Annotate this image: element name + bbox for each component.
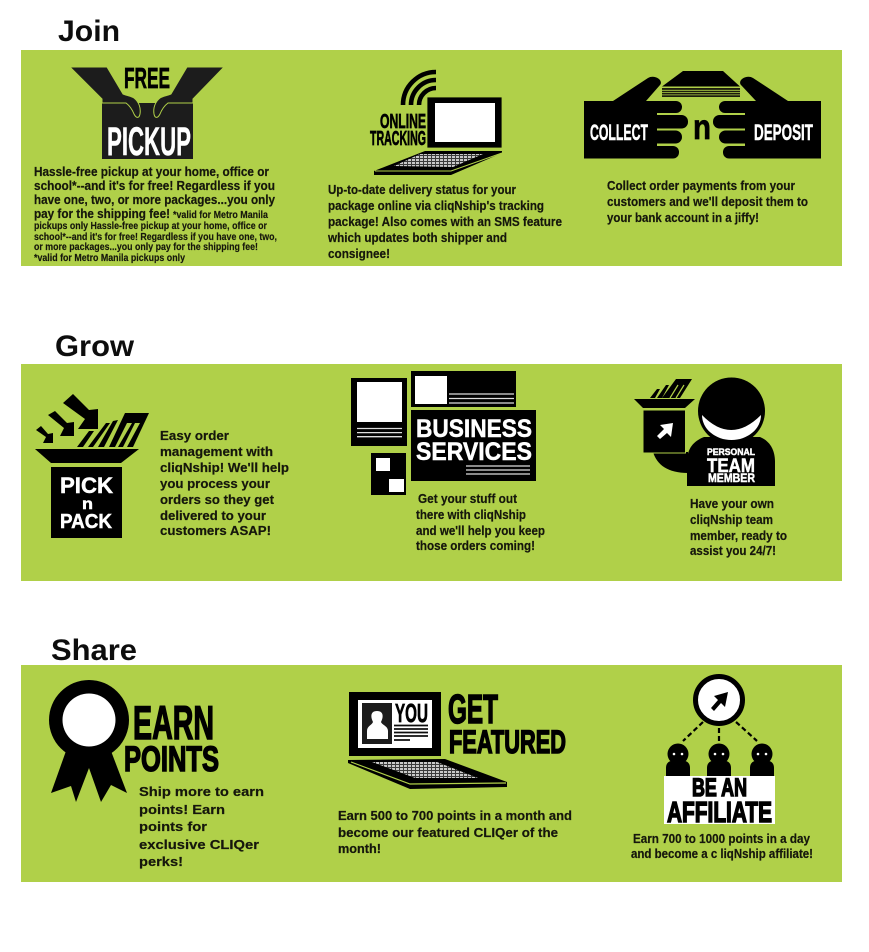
text: free pickup description: school*--and it's for free! Regardless if you have one, two,: [34, 232, 277, 243]
text: be an affiliate description: Earn 700 to 1000 points in a day: [633, 832, 810, 846]
text: personal team member description: assist you 24/7!: [690, 544, 776, 558]
text: get featured description: become our featured CLIQer of the: [338, 826, 558, 840]
icon: free pickup: PICKUP: [107, 120, 191, 164]
icon: business services: SERVICES: [416, 438, 532, 466]
icon: online tracking laptop: [370, 72, 502, 175]
text: free pickup description: *valid for Metro Manila pickups only: [34, 253, 185, 264]
text: pick n pack description: orders so they get: [160, 493, 275, 507]
text: personal team member description: member, ready to: [690, 529, 787, 543]
panel: Join: [21, 50, 842, 266]
icon: be an affiliate: [664, 676, 775, 829]
icon: get featured laptop: [348, 686, 566, 789]
icon: pick n pack: n: [82, 496, 93, 513]
text: free pickup description: pay for the shipping fee!: [34, 207, 170, 221]
icon: get featured laptop: GET: [448, 686, 498, 732]
text: free pickup description: school*--and it's for free! Regardless if you: [34, 179, 275, 193]
text: earn points description: [139, 785, 264, 869]
text: pick n pack description: Easy order: [160, 429, 229, 443]
text: earn points description: Ship more to earn: [139, 785, 264, 799]
text: get featured description: [338, 809, 572, 856]
icon: earn points ribbon: EARN: [133, 696, 214, 749]
text: earn points description: points! Earn: [139, 803, 225, 817]
icon: personal team member: [634, 378, 775, 486]
icon: collect n deposit: DEPOSIT: [754, 120, 813, 145]
text: online tracking description: package! Also comes with an SMS feature: [328, 215, 562, 229]
panel: Grow: [21, 364, 842, 581]
text: free pickup description: or more packages...you only pay for the shipping fee!: [34, 242, 258, 253]
text: business services description: and we'll help you keep: [416, 524, 545, 538]
icon: business services: [351, 371, 536, 495]
text: pick n pack description: customers ASAP!: [160, 524, 271, 538]
icon: online tracking laptop: TRACKING: [370, 128, 426, 150]
text: business services description: there with cliqNship: [416, 508, 526, 522]
icon: pick n pack: PACK: [60, 510, 112, 533]
text: pick n pack description: management with: [160, 445, 273, 459]
icon: pick n pack: [35, 394, 149, 538]
text: pick n pack description: [160, 429, 289, 538]
text: free pickup description: *valid for Metro Manila: [173, 210, 268, 221]
icon: be an affiliate: BE AN: [692, 774, 747, 802]
text: be an affiliate description: [631, 832, 813, 861]
icon: personal team member: MEMBER: [708, 471, 755, 485]
text: online tracking description: package online via cliqNship's tracking: [328, 199, 544, 213]
text: free pickup description: Hassle-free pickup at your home, office or: [34, 165, 269, 179]
text: online tracking description: Up-to-date delivery status for your: [328, 183, 516, 197]
text: get featured description: Earn 500 to 700 points in a month and: [338, 809, 572, 823]
icon: personal team member: TEAM: [707, 456, 755, 477]
icon: free pickup: FREE: [124, 63, 170, 95]
text: pick n pack description: delivered to your: [160, 509, 266, 523]
text: earn points description: points for: [139, 820, 207, 834]
text: free pickup description: pickups only Hassle-free pickup at your home, office or: [34, 221, 267, 232]
icon: free pickup: [70, 63, 224, 164]
text: free pickup description: [34, 165, 277, 264]
text: business services description: [416, 492, 545, 553]
text: online tracking description: [327, 183, 562, 261]
text: pick n pack description: you process your: [160, 477, 270, 491]
text: be an affiliate description: and become a c liqNship affiliate!: [631, 847, 813, 861]
text: online tracking description: consignee!: [328, 247, 390, 261]
icon: be an affiliate: AFFILIATE: [667, 797, 772, 829]
text: free pickup description: have one, two, or more packages...you only: [34, 193, 275, 207]
text: pick n pack description: cliqNship! We'll help: [160, 461, 289, 475]
icon: earn points ribbon: [49, 680, 219, 802]
text: earn points description: exclusive CLIQer: [139, 838, 259, 852]
text: get featured description: month!: [338, 842, 381, 856]
text: collect n deposit description: your bank account in a jiffy!: [607, 211, 759, 225]
text: earn points description: perks!: [139, 855, 183, 869]
text: personal team member description: cliqNship team: [690, 513, 773, 527]
icon: online tracking laptop: ONLINE: [380, 111, 426, 133]
text: collect n deposit description: [607, 179, 808, 225]
text: collect n deposit description: customers and we'll deposit them to: [607, 195, 808, 209]
text: online tracking description: which updates both shipper and: [327, 231, 507, 245]
icon: earn points ribbon: POINTS: [124, 740, 219, 779]
icon: collect n deposit: n: [693, 108, 711, 147]
icon: personal team member: PERSONAL: [707, 447, 755, 458]
icon: pick n pack: PICK: [60, 473, 113, 498]
text: business services description: those orders coming!: [416, 539, 535, 553]
icon: collect n deposit: [584, 71, 821, 158]
text: personal team member description: [690, 497, 787, 558]
text: personal team member description: Have your own: [690, 497, 774, 511]
icon: collect n deposit: COLLECT: [590, 120, 648, 145]
panel: Share: [21, 665, 842, 882]
heading: Join: Join: [58, 15, 120, 48]
icon: get featured laptop: YOU: [395, 698, 428, 728]
heading: Share: Share: [51, 634, 137, 667]
text: business services description: Get your stuff out: [418, 492, 518, 506]
text: collect n deposit description: Collect order payments from your: [607, 179, 795, 193]
icon: business services: BUSINESS: [416, 415, 532, 443]
heading: Grow: Grow: [55, 330, 135, 363]
icon: get featured laptop: FEATURED: [449, 724, 566, 760]
